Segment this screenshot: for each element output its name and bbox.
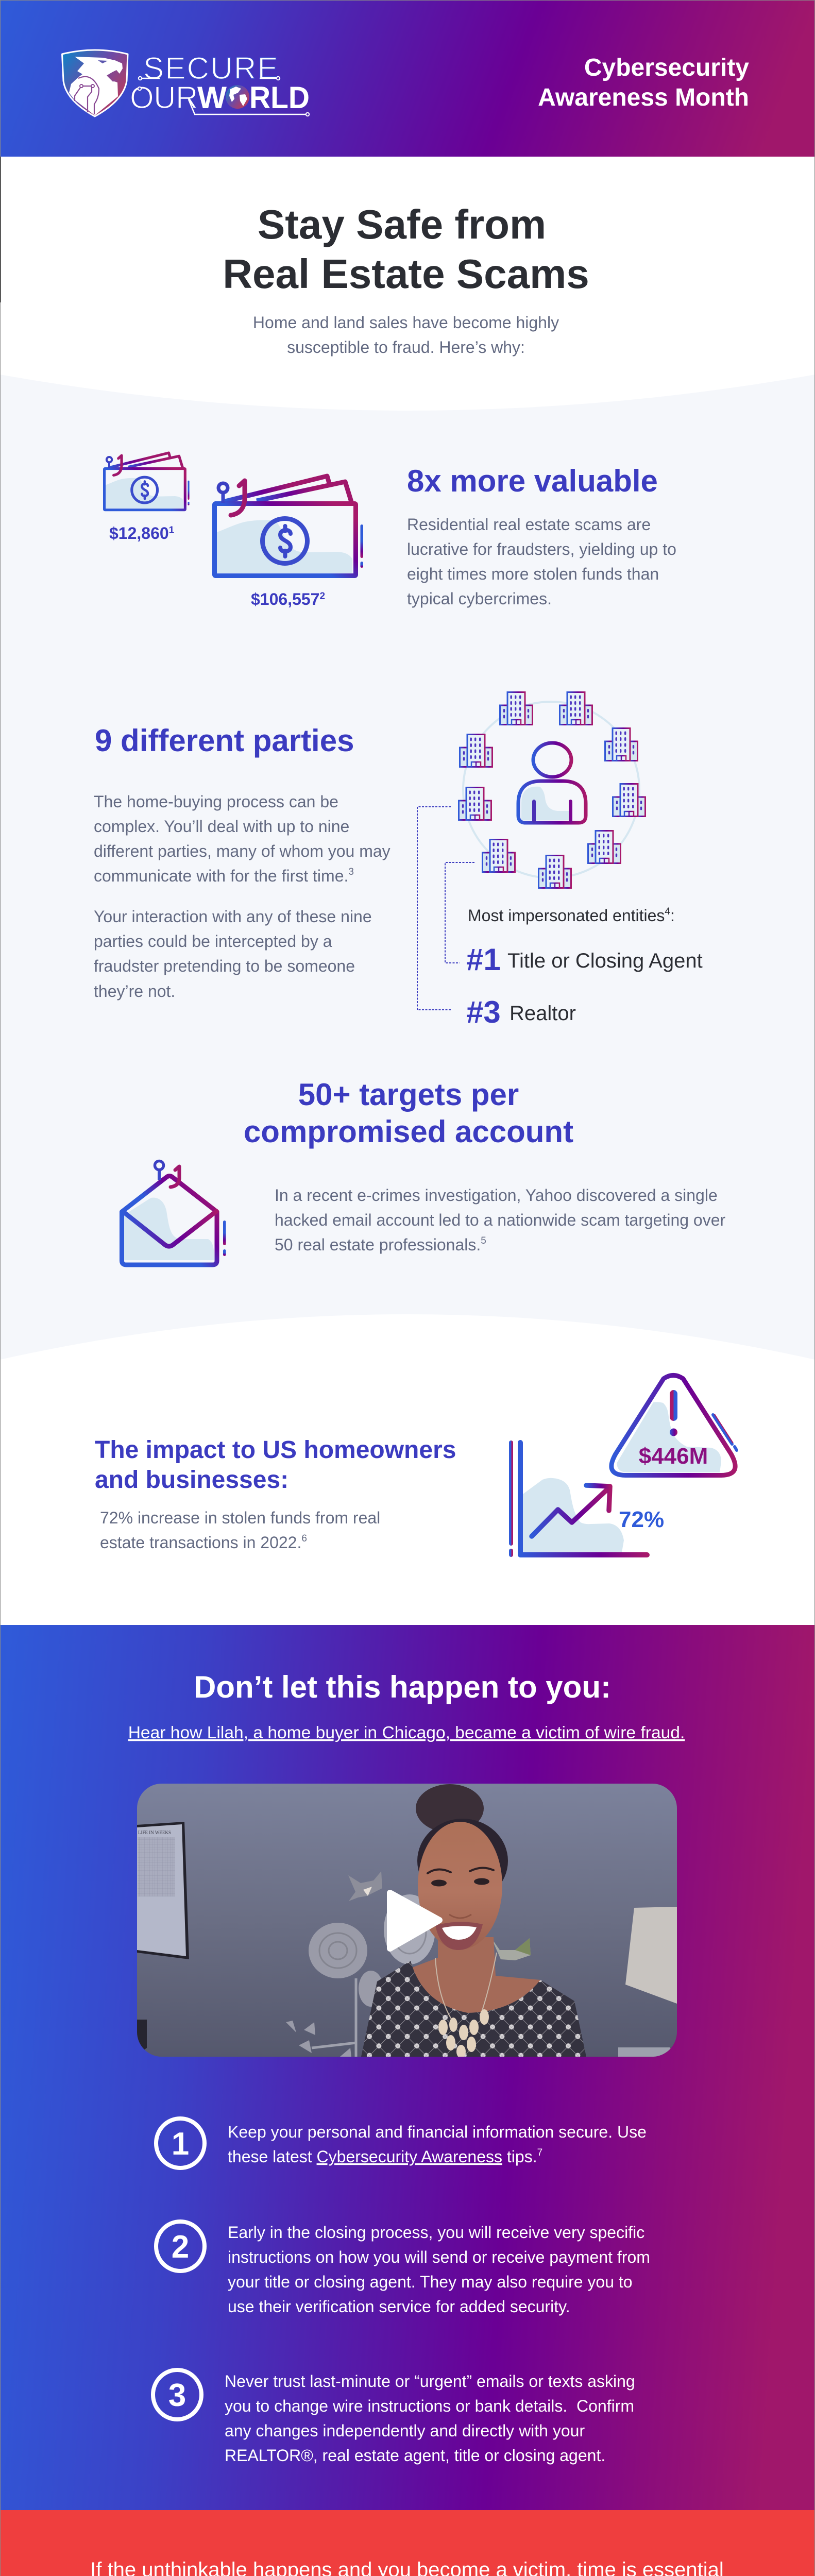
text: 72% increase: 6 <box>301 1533 307 1544</box>
text: interception warning: parties could be intercepted by a <box>94 932 332 951</box>
poster <box>137 1822 189 1959</box>
text: step 3: you to change wire instructions or bank details. Confirm <box>225 2397 634 2415</box>
text: residential scams: typical cybercrimes. <box>407 589 552 608</box>
text: step 3 <box>225 2372 635 2465</box>
logo wordmark: SECURE <box>143 51 279 86</box>
text: interception warning: fraudster pretending to be someone <box>94 957 355 975</box>
text: step 3: any changes independently and directly with your <box>225 2421 585 2440</box>
subtitle: Home and land sales have become highly <box>253 313 559 332</box>
text: residential scams: Residential real estate scams are <box>407 515 651 534</box>
wall flowers <box>286 1894 435 2057</box>
heading: 50+ targets: compromised account <box>244 1114 573 1149</box>
lamp <box>625 1907 677 2004</box>
icon: play button <box>390 1893 439 1948</box>
text: step 3: REALTOR®, real estate agent, title or closing agent. <box>225 2446 605 2465</box>
text: interception warning: Your interaction with any of these nine <box>94 907 372 926</box>
text: step 2: your title or closing agent. They may also require you to <box>228 2273 633 2291</box>
text: home-buying process: communicate with for the first time. <box>94 867 348 885</box>
heading: Don't let this happen: Don’t let this happen to you: <box>194 1670 611 1704</box>
panel: impact to US homeowners <box>95 1376 737 1557</box>
icon: eagle shield <box>62 50 128 116</box>
title <box>223 201 589 297</box>
ranking: #3: Realtor <box>510 1002 576 1025</box>
text: step 2: instructions on how you will send or receive payment from <box>228 2248 650 2266</box>
icon: number 1 <box>156 2119 205 2168</box>
text: residential scams <box>407 515 676 608</box>
text: interception warning <box>94 907 372 1001</box>
logo wordmark <box>130 51 310 116</box>
label: most impersonated: 4 <box>665 906 670 917</box>
heading: Cybersecurity Awareness Month: Awareness Month <box>538 84 749 111</box>
connector: outer dashed line <box>417 807 451 1010</box>
connector: inner dashed line <box>445 862 474 963</box>
logo: Secure Our World <box>62 50 310 116</box>
text: step 1 <box>228 2123 647 2166</box>
logo wordmark: RLD <box>249 80 310 115</box>
label: $12,860: $12,860 <box>109 524 169 543</box>
text: step 2: use their verification service for added security. <box>228 2297 570 2316</box>
text: Yahoo investigation: In a recent e-crimes investigation, Yahoo discovered a single <box>275 1186 718 1205</box>
icon: warning triangle <box>612 1376 737 1476</box>
panel: 8x more valuable <box>105 453 676 608</box>
text: 72% increase <box>100 1509 380 1552</box>
panel: red callout <box>0 2510 815 2576</box>
label: $106,557: 2 <box>319 591 325 602</box>
label: $106,557: $106,557 <box>251 590 319 608</box>
heading: impact <box>95 1436 456 1494</box>
logo wordmark: OUR <box>130 80 198 115</box>
text: home-buying process: The home-buying process can be <box>94 792 338 811</box>
text: interception warning: they’re not. <box>94 982 175 1001</box>
icon: hooked envelope <box>122 1161 226 1265</box>
step 1 <box>156 2119 647 2168</box>
ranking: #1 <box>466 942 703 977</box>
panel: don't let this happen to you <box>0 1625 815 2510</box>
text: step 1: these latest Cybersecurity Awareness tips. <box>228 2147 537 2166</box>
title: Stay Safe from <box>258 201 546 247</box>
icon: person <box>518 743 586 823</box>
icon: number 1: 1 <box>172 2126 189 2162</box>
label: most impersonated: : <box>670 906 675 925</box>
text: home-buying process: different parties, many of whom you may <box>94 842 390 860</box>
text: residential scams: eight times more stolen funds than <box>407 565 659 583</box>
ranking: #3 <box>466 995 576 1029</box>
panel: 50+ targets <box>122 1077 726 1265</box>
woman <box>361 1784 586 2058</box>
text: step 3: Never trust last-minute or “urgent” emails or texts asking <box>225 2372 635 2391</box>
heading: 8x more valuable: 8x more valuable <box>407 464 658 498</box>
text: Yahoo investigation: 5 <box>481 1235 486 1246</box>
text: step 2 <box>228 2223 650 2316</box>
ranking: #1: Title or Closing Agent <box>507 950 703 972</box>
heading: 9 different parties: 9 different parties <box>95 723 354 758</box>
hummingbirds <box>348 1871 531 1960</box>
video thumbnail <box>137 1784 677 2058</box>
label: $12,860: 1 <box>169 525 175 536</box>
icon: large phished money <box>214 476 363 576</box>
heading: Cybersecurity Awareness Month <box>538 54 749 111</box>
label: most impersonated: Most impersonated entities <box>468 906 665 925</box>
ranking: #1: #1 <box>466 942 501 977</box>
text: Yahoo investigation <box>275 1186 726 1254</box>
subtitle: susceptible to fraud. Here’s why: <box>287 338 525 357</box>
icon: number 3: 3 <box>168 2378 186 2413</box>
link: Lilah story: Hear how Lilah, a home buyer in Chicago, became a victim of wire fraud. <box>128 1723 685 1742</box>
diagram: ring of parties <box>459 692 645 888</box>
text: home-buying process: 3 <box>348 867 354 877</box>
heading: impact: The impact to US homeowners <box>95 1436 456 1464</box>
subtitle <box>253 313 559 357</box>
icon: number 2: 2 <box>172 2229 189 2265</box>
text: Yahoo investigation: 50 real estate professionals. <box>275 1235 481 1254</box>
step 3 <box>153 2370 635 2465</box>
text: Yahoo investigation: hacked email account led to a nationwide scam targeting over <box>275 1211 726 1229</box>
logo wordmark: W <box>197 80 227 115</box>
text: step 1: 7 <box>537 2147 542 2158</box>
step 2 <box>156 2222 650 2316</box>
icon: small phished money <box>105 453 190 510</box>
icon: number 2 <box>156 2222 205 2271</box>
heading: impact: and businesses: <box>95 1466 288 1494</box>
label: 72%: 72% <box>619 1507 664 1532</box>
text: home-buying process: complex. You’ll deal with up to nine <box>94 817 349 836</box>
icon: number 3 <box>153 2370 201 2419</box>
heading: Cybersecurity Awareness Month: Cybersecurity <box>584 54 749 81</box>
text: 72% increase: 72% increase in stolen funds from real <box>100 1509 380 1527</box>
panel: header banner <box>0 0 815 157</box>
text: step 1: Keep your personal and financial information secure. Use <box>228 2123 647 2141</box>
panel: introduction <box>0 157 815 375</box>
icon: buildings <box>459 692 645 888</box>
heading: 50+ targets <box>244 1077 573 1149</box>
label: $446M: $446M <box>639 1444 708 1469</box>
heading: 50+ targets: 50+ targets per <box>298 1077 519 1112</box>
text: home-buying process <box>94 792 390 885</box>
ranking: #3: #3 <box>466 995 501 1029</box>
panel: light statistics background <box>0 375 815 1360</box>
panel: 9 different parties <box>94 692 703 1029</box>
chart: rising trend <box>509 1440 664 1557</box>
text: step 2: Early in the closing process, you will receive very specific <box>228 2223 644 2242</box>
title: Real Estate Scams <box>223 251 589 297</box>
poster: LIFE IN WEEKS <box>138 1830 171 1835</box>
text: residential scams: lucrative for fraudsters, yielding up to <box>407 540 676 558</box>
text: 72% increase: estate transactions in 2022. <box>100 1533 301 1552</box>
